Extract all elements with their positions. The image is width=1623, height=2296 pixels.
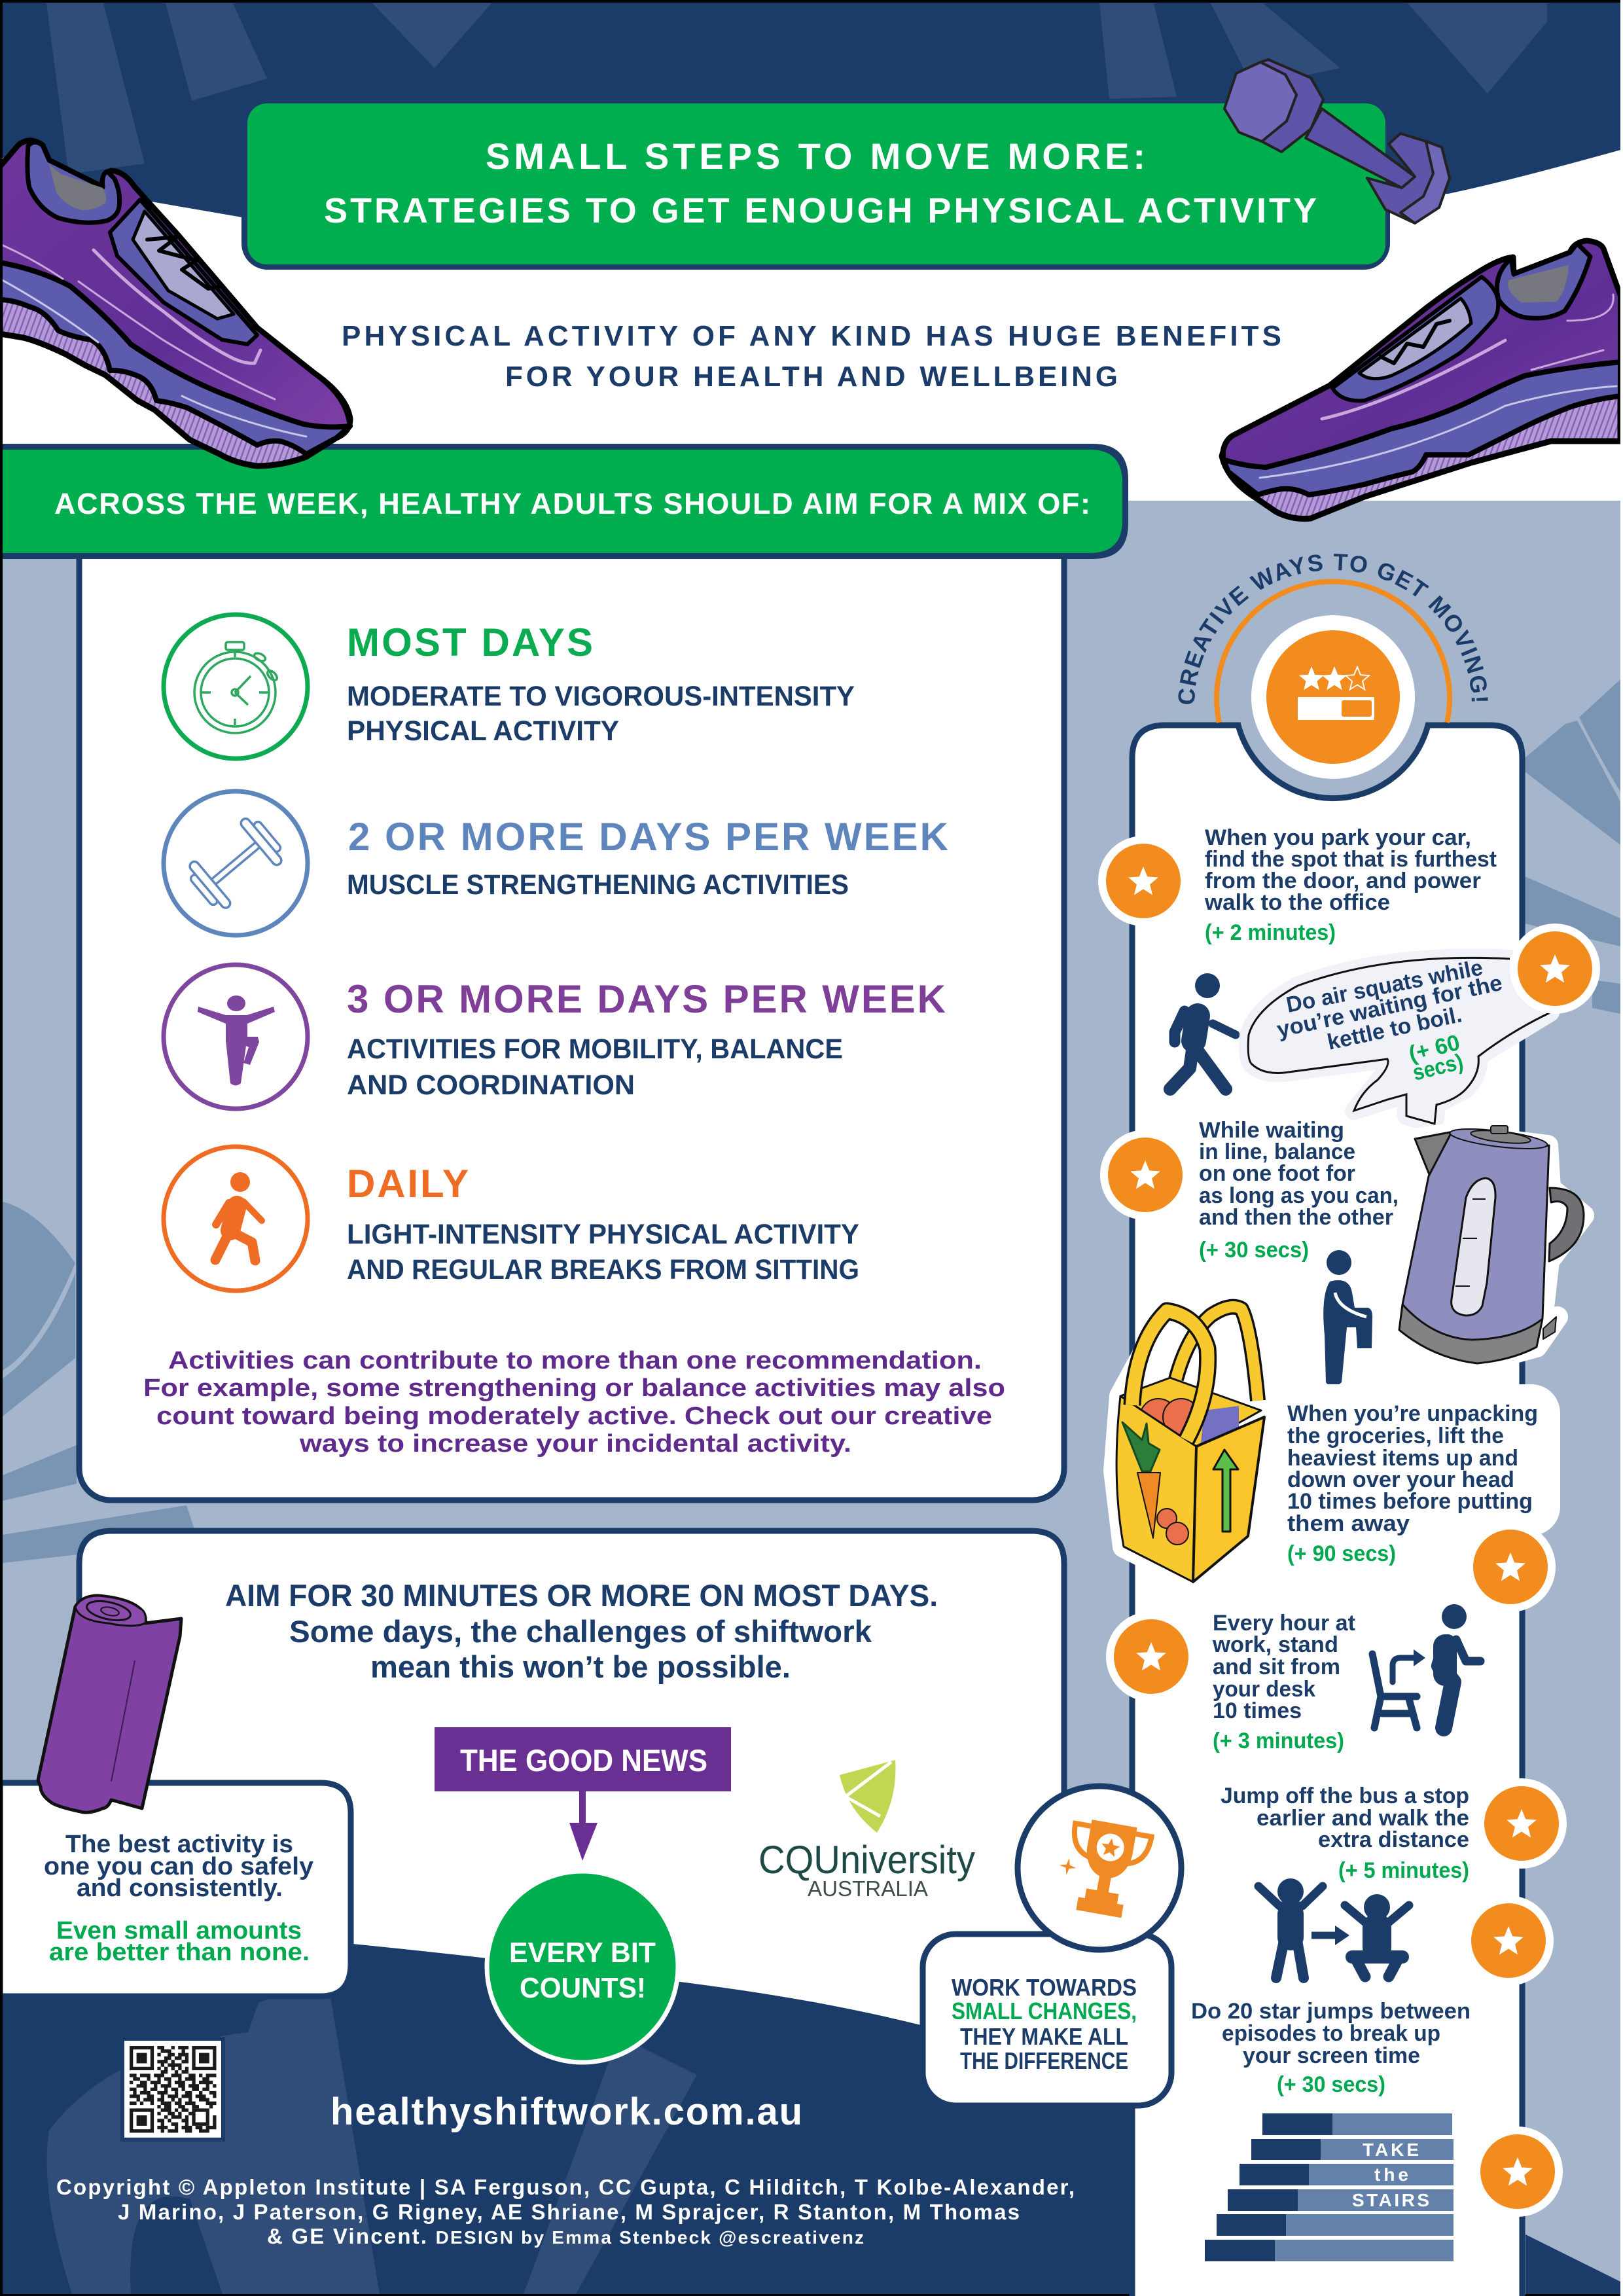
text: website: healthyshiftwork.com.au <box>330 2090 802 2133</box>
heading: 2 or more days: 2 OR MORE DAYS PER WEEK <box>348 815 948 859</box>
logo: CQUniversity Australia <box>758 1760 975 1901</box>
text: best activity: The best activity is <box>65 1831 293 1858</box>
tip: stand and sit: and sit from <box>1213 1655 1340 1679</box>
tip: balance on one foot: in line, balance <box>1199 1139 1355 1164</box>
tip: balance on one foot: on one foot for <box>1199 1161 1355 1186</box>
text: small amounts: Even small amounts <box>56 1917 302 1945</box>
text: muscle strengthening: MUSCLE STRENGTHENING ACTIVITIES <box>347 869 849 901</box>
icon: star badge 5 <box>1106 1611 1196 1702</box>
tip: jump off the bus: Jump off the bus a stop <box>1221 1784 1469 1808</box>
callout: work towards small changes: WORK TOWARDS <box>952 1974 1137 2001</box>
icon: star jump to squat <box>1258 1878 1409 1978</box>
text: best activity: and consistently. <box>77 1874 283 1902</box>
arrow: good news to every bit counts <box>569 1791 597 1861</box>
text: purple note: count toward being moderately active. Check out our creative <box>156 1403 992 1430</box>
callout: air squats speech bubble: kettle to boil. <box>1325 1002 1464 1055</box>
panel: best activity card <box>0 1783 351 1996</box>
banner: across the week: ACROSS THE WEEK, HEALTHY ADULTS SHOULD AIM FOR A MIX OF: <box>54 487 1090 520</box>
text: purple note: Activities can contribute to more than one recommendation. <box>168 1347 982 1374</box>
tip: jump off the bus: extra distance <box>1318 1827 1469 1852</box>
callout: air squats speech bubble: you’re waiting for the <box>1275 971 1505 1043</box>
decorative orange arc <box>1217 581 1450 723</box>
banner: across the week <box>0 444 1128 559</box>
tip: park your car: (+ 2 minutes) <box>1205 920 1336 945</box>
text: moderate to vigorous <box>347 681 855 747</box>
icon: QR code <box>120 2037 225 2142</box>
icon: take the stairs: STAIRS <box>1352 2190 1429 2210</box>
tip: balance on one foot: as long as you can, <box>1199 1183 1399 1208</box>
tip: unpacking groceries: When you’re unpacking <box>1287 1401 1538 1426</box>
icon: walking figure in orange ring <box>164 1147 308 1291</box>
tip: star jumps <box>1191 1999 1471 2097</box>
icon: star badge 3 <box>1100 1130 1190 1220</box>
text: best activity <box>44 1831 313 1902</box>
callout: the good news: THE GOOD NEWS <box>460 1743 707 1778</box>
tip: jump off the bus <box>1221 1784 1469 1883</box>
icon: star badge 4 <box>1465 1522 1556 1612</box>
tip: unpacking groceries: (+ 90 secs) <box>1287 1541 1396 1566</box>
tip: park your car: walk to the office <box>1204 890 1390 915</box>
tip: unpacking groceries: 10 times before putting <box>1287 1489 1533 1514</box>
icon: kettle <box>1399 1125 1584 1363</box>
icon: trophy badge <box>1018 1786 1181 1950</box>
tip: unpacking groceries: down over your head <box>1287 1467 1514 1492</box>
text: small amounts <box>49 1917 310 1966</box>
text: light intensity <box>347 1219 859 1285</box>
text: mobility: AND COORDINATION <box>347 1069 635 1101</box>
text: copyright: Copyright © Appleton Institute | SA Ferguson, CC Gupta, C Hilditch, T Kolbe-Alexander, <box>56 2175 1075 2199</box>
tip: star jumps: episodes to break up <box>1222 2021 1440 2046</box>
logo: CQUniversity Australia: AUSTRALIA <box>808 1876 928 1901</box>
callout: air squats speech bubble: Do air squats while <box>1284 955 1485 1018</box>
tip: stand and sit: Every hour at <box>1213 1611 1355 1636</box>
panel: creative ways to get moving <box>1098 554 1600 2296</box>
text: copyright: J Marino, J Paterson, G Rigney, AE Shriane, M Sprajcer, R Stanton, M Thomas <box>118 2200 1020 2224</box>
tip: stand and sit: work, stand <box>1212 1632 1338 1657</box>
text: moderate to vigorous: PHYSICAL ACTIVITY <box>347 715 619 747</box>
text: aim for 30 minutes <box>225 1578 938 1684</box>
tip: stand and sit: (+ 3 minutes) <box>1213 1729 1344 1753</box>
icon: dumbbell <box>1224 60 1450 223</box>
text: aim for 30 minutes: Some days, the challenges of shiftwork <box>289 1614 872 1649</box>
subheading: FOR YOUR HEALTH AND WELLBEING <box>505 361 1118 393</box>
title banner: STRATEGIES TO GET ENOUGH PHYSICAL ACTIVITY <box>324 191 1317 230</box>
text: copyright: & GE Vincent. DESIGN by Emma Stenbeck @escreativenz <box>267 2224 864 2248</box>
text: small amounts: are better than none. <box>49 1939 310 1966</box>
text: light intensity: LIGHT-INTENSITY PHYSICAL ACTIVITY <box>347 1219 859 1250</box>
tip: stand and sit: 10 times <box>1213 1698 1302 1723</box>
callout: air squats speech bubble: (+ 60 <box>1406 1030 1463 1067</box>
text: mobility <box>347 1033 843 1101</box>
callout: air squats speech bubble <box>1248 955 1550 1124</box>
icon: take the stairs: TAKE <box>1363 2140 1419 2160</box>
icon: balancing person <box>1323 1250 1372 1387</box>
tip: balance on one foot: While waiting <box>1199 1118 1344 1143</box>
text: best activity: one you can do safely <box>44 1853 313 1880</box>
text: copyright <box>56 2175 1075 2248</box>
icon: chair and standing person <box>1372 1604 1480 1728</box>
tip: star jumps: Do 20 star jumps between <box>1191 1999 1471 2024</box>
title banner <box>241 103 1390 270</box>
tip: star jumps: (+ 30 secs) <box>1277 2072 1385 2097</box>
icon: star badge 8 <box>1472 2126 1563 2217</box>
text: light intensity: AND REGULAR BREAKS FROM SITTING <box>347 1254 859 1285</box>
icon: star badge 2 <box>1510 924 1600 1014</box>
callout: work towards small changes <box>923 1934 1171 2106</box>
icon: grocery bag <box>1115 1307 1264 1582</box>
title banner: SMALL STEPS TO MOVE MORE: <box>486 135 1145 177</box>
tip: park your car: When you park your car, <box>1205 825 1471 850</box>
icon: left running shoe <box>0 141 350 466</box>
callout: work towards small changes: THEY MAKE ALL <box>960 2023 1128 2050</box>
text: aim for 30 minutes: mean this won’t be possible. <box>370 1649 791 1684</box>
background: bottom navy wave <box>0 1918 1623 2296</box>
subheading: PHYSICAL ACTIVITY OF ANY KIND HAS HUGE BENEFITS <box>342 320 1281 352</box>
tip: unpacking groceries: them away <box>1287 1511 1410 1536</box>
logo: CQUniversity Australia: CQUniversity <box>758 1838 975 1882</box>
text: mobility: ACTIVITIES FOR MOBILITY, BALANCE <box>347 1033 843 1065</box>
icon: rating badge <box>1251 615 1415 779</box>
panel: aim for 30 minutes card <box>0 1531 1134 2134</box>
panel: weekly recommendations card <box>79 524 1064 1500</box>
icon: star badge 7 <box>1463 1895 1554 1986</box>
tip: park your car: from the door, and power <box>1205 869 1481 893</box>
callout: air squats speech bubble: secs) <box>1410 1049 1466 1086</box>
tip: balance on one foot: (+ 30 secs) <box>1199 1238 1309 1263</box>
callout: every bit counts: COUNTS! <box>520 1972 646 2004</box>
text: aim for 30 minutes: AIM FOR 30 MINUTES OR MORE ON MOST DAYS. <box>225 1578 938 1613</box>
icon: take the stairs <box>1205 2113 1454 2261</box>
text: moderate to vigorous: MODERATE TO VIGOROUS-INTENSITY <box>347 681 855 712</box>
tip: balance on one foot: and then the other <box>1199 1205 1393 1230</box>
icon: right running shoe <box>1222 241 1620 519</box>
text: purple note: ways to increase your incidental activity. <box>299 1430 851 1458</box>
subheading <box>342 320 1281 393</box>
icon: yoga mat <box>38 1596 181 1812</box>
tip: unpacking groceries <box>1276 1384 1560 1566</box>
tip: park your car: find the spot that is furthest <box>1205 847 1497 872</box>
icon: star badge 6 <box>1476 1778 1567 1869</box>
heading: creative ways curved: CREATIVE WAYS TO GET MOVING! <box>1178 554 1488 704</box>
tip: park your car <box>1204 825 1497 945</box>
text: purple note <box>143 1347 1005 1458</box>
callout: work towards small changes: THE DIFFERENCE <box>960 2047 1128 2074</box>
icon: take the stairs: the <box>1374 2164 1408 2185</box>
tip: stand and sit: your desk <box>1213 1677 1315 1702</box>
tip: unpacking groceries: heaviest items up and <box>1287 1446 1518 1471</box>
icon: barbell in blue ring <box>164 791 308 935</box>
tip: jump off the bus: earlier and walk the <box>1257 1806 1469 1831</box>
heading: 3 or more days: 3 OR MORE DAYS PER WEEK <box>347 977 946 1021</box>
tip: unpacking groceries: the groceries, lift the <box>1287 1424 1504 1448</box>
icon: stopwatch in green ring <box>164 615 308 759</box>
callout: every bit counts: EVERY BIT <box>509 1937 656 1969</box>
tip: stand and sit <box>1212 1611 1355 1753</box>
text: purple note: For example, some strengthening or balance activities may also <box>143 1374 1005 1402</box>
tip: star jumps: your screen time <box>1243 2043 1420 2068</box>
tip: balance on one foot <box>1199 1118 1399 1263</box>
heading: most days: MOST DAYS <box>347 620 593 664</box>
icon: walking person <box>1170 973 1236 1089</box>
callout: every bit counts <box>487 1871 678 2062</box>
callout: the good news <box>435 1727 731 1791</box>
heading: daily: DAILY <box>347 1162 469 1206</box>
icon: star badge 1 <box>1098 836 1188 926</box>
callout: work towards small changes: SMALL CHANGES, <box>952 1998 1137 2024</box>
icon: balance figure in purple ring <box>164 965 308 1109</box>
tip: jump off the bus: (+ 5 minutes) <box>1338 1858 1469 1883</box>
